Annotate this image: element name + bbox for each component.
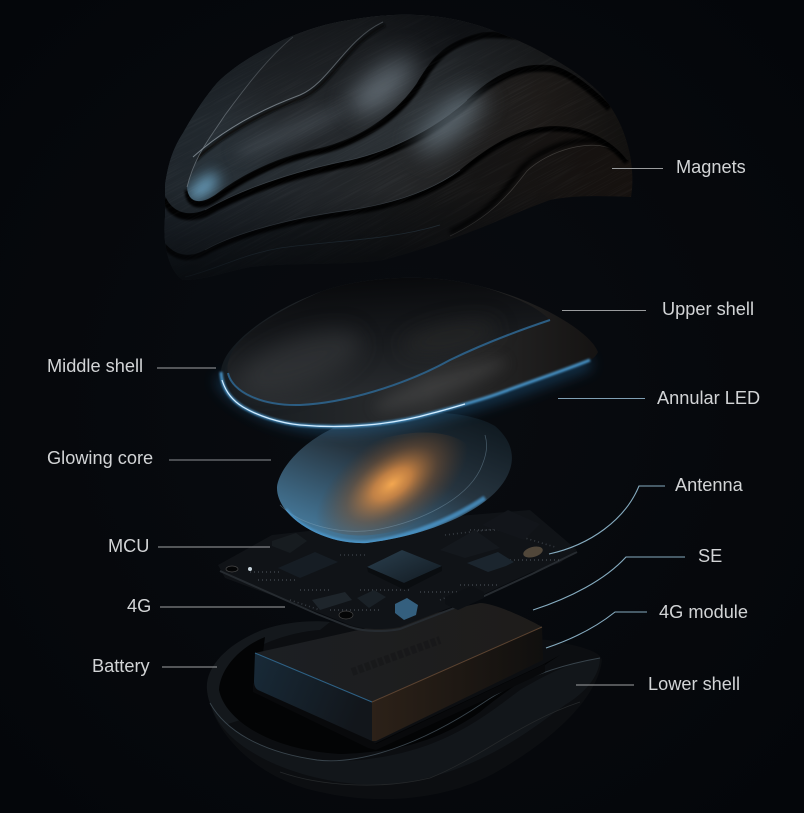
groove 1 shadow [188,35,518,204]
inner wave ridge [450,140,613,232]
leader: Magnets [612,168,663,170]
left chip [278,552,338,578]
bottom fade [164,198,494,280]
lower blue edge [285,498,485,543]
leader: SE [533,557,685,610]
inner wave ridge light [450,145,614,236]
lower lobe sheen [240,107,340,156]
upper shell right sheen [430,328,474,338]
brushed texture [187,88,546,193]
orange glow [294,413,490,555]
lower contour line [280,702,580,785]
leader: Lower shell [576,684,634,686]
leader: Battery [162,666,217,668]
left face [254,653,372,741]
battery right highlight [372,627,542,702]
leader: Antenna [549,486,665,554]
label: Battery: Battery [92,656,151,676]
shell band [212,658,600,785]
embossed label [352,640,440,672]
lower shell [207,621,602,799]
battery [253,603,545,750]
battery left highlight [255,653,372,702]
outer body [207,621,602,799]
base layer [166,132,632,271]
small chip [357,590,386,608]
label: SE: SE [698,546,722,566]
centre highlight [343,48,423,120]
pcb edge [220,552,577,631]
tip highlight [183,169,223,207]
connector [312,592,352,610]
label: MCU: MCU [108,536,149,556]
solder dots 2 [290,529,555,610]
groove 3 shadow [165,128,627,257]
leader: Glowing core [169,459,271,461]
edge lights [205,100,467,210]
label: Magnets: Magnets [676,157,746,177]
groove 2 shadow [165,68,610,216]
inner blue line [228,320,550,405]
lowest band line [185,225,440,277]
LED halo [221,362,590,427]
band B edge light [205,170,460,250]
antenna component [522,545,544,559]
middle and upper shell [215,270,605,435]
left ridge [187,37,293,187]
upper shell top [228,276,550,405]
mounting hole bottom [339,611,353,619]
label: Glowing core: Glowing core [47,448,153,468]
leader: MCU [158,546,270,548]
glowing core [277,412,512,555]
label: Upper shell: Upper shell [662,299,754,319]
leader: 4G module [546,612,647,648]
SE module [445,586,484,610]
annular LED core line [222,380,465,426]
layer B [166,76,628,254]
lobe highlights [183,25,423,207]
label: Annular LED: Annular LED [657,388,760,408]
mounting hole left [226,566,238,572]
label: Lower shell: Lower shell [648,674,740,694]
inner rim [280,435,487,531]
annular LED glow line [221,360,590,426]
top face [255,603,542,702]
leader lines [157,168,685,685]
circuit board [218,510,577,631]
core body [277,412,512,543]
label: Antenna: Antenna [675,475,744,495]
brushed band sheen [382,360,498,409]
inner cavity [219,637,560,754]
right chip [467,552,514,572]
centre chip side [367,566,442,590]
leader: Upper shell [562,310,646,312]
upper shell left sheen [246,328,358,388]
top right fade [219,15,514,104]
pcb base [218,510,577,629]
right face [372,627,543,741]
layer C [166,48,606,213]
brushed highlight on layer C [409,83,491,161]
ridge light [193,22,383,157]
leader: Middle shell [157,367,216,369]
leader: 4G [160,606,285,608]
label: 4G: 4G [127,596,151,616]
rear chip [440,530,500,558]
bright dot [248,567,252,571]
shell body [221,278,598,426]
top shell with magnets [164,14,632,277]
centre chip [367,550,442,583]
ridge shadow [195,25,385,160]
bright component [395,598,418,620]
layer D front lobe [187,15,488,202]
top chip [482,510,540,540]
rim line [210,658,600,761]
MCU chip [272,533,307,553]
label: 4G module: 4G module [659,602,748,622]
battery lip [253,664,545,750]
label: Middle shell: Middle shell [47,356,143,376]
back rim [207,621,330,725]
solder dots [250,530,560,610]
leader: Annular LED [558,398,645,400]
